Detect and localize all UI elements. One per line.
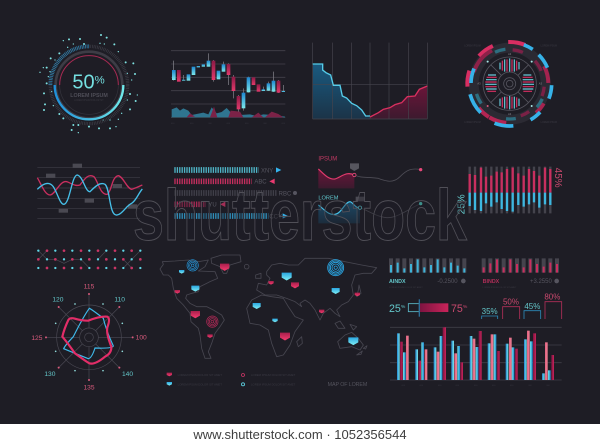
75% label: 75 xyxy=(451,303,463,315)
gauge sublabel: LOREM IPSUM DOLOR SIT xyxy=(74,100,104,102)
25% label: 25 xyxy=(389,303,401,315)
bar chart axis labels: 000 xyxy=(510,385,514,387)
LOREM line xyxy=(318,202,360,214)
IPSUM line xyxy=(318,169,354,179)
AINDX icon xyxy=(461,279,466,283)
bar chart grid xyxy=(390,327,562,380)
index sublabels xyxy=(389,286,517,289)
HUD corner labels: LOREM IPSUM xyxy=(464,122,481,124)
gauge ticks xyxy=(50,46,128,124)
map legend: LOREM IPSUM DOLOR SIT AMET xyxy=(178,373,222,377)
panel: mini line charts xyxy=(318,157,422,223)
gauge value text: 50 xyxy=(72,71,95,93)
bar chart axis labels: 000 xyxy=(420,385,424,387)
HUD right bars xyxy=(523,75,534,91)
bar chart axis labels: 000 xyxy=(456,385,460,387)
blue candles xyxy=(172,61,285,108)
step chart grid xyxy=(313,43,427,119)
gauge base ring xyxy=(56,52,122,118)
gauge pink arc xyxy=(60,56,118,85)
map legend: LOREM IPSUM DOLOR SIT AMET xyxy=(178,382,222,386)
radar labels: 130 xyxy=(44,371,56,378)
map pulse: North America xyxy=(187,260,198,271)
footer strip xyxy=(0,424,600,444)
panel: AINDX and BINDX indices xyxy=(389,258,559,289)
radar labels: 120 xyxy=(52,296,64,303)
LOREM heading: LOREM xyxy=(318,195,339,201)
map legend: LOREM IPSUM DOLOR SIT AMET xyxy=(251,373,296,377)
cyan-blue bars xyxy=(397,333,545,380)
45% bracket: 45% xyxy=(524,302,540,311)
pink fill bar xyxy=(419,303,448,312)
teal outline box xyxy=(408,304,419,312)
gauge value arc xyxy=(55,85,123,119)
map outlines xyxy=(160,255,377,358)
gauge scattered dots xyxy=(39,34,138,133)
25% label: % xyxy=(401,304,406,310)
HUD corner labels: LOREM IPSUM xyxy=(541,46,557,48)
HUD inner rings xyxy=(483,57,536,110)
watermark: shutterstock xyxy=(133,176,468,256)
radar spoke end dots xyxy=(45,293,134,381)
BINDX label: BINDX xyxy=(483,279,500,285)
blue-cyan bars xyxy=(403,334,551,380)
panel: step area chart xyxy=(313,43,427,119)
radar pink polygon xyxy=(62,317,111,364)
radar labels: 140 xyxy=(122,371,133,378)
panel: candlestick chart xyxy=(171,51,286,125)
radar labels: 110 xyxy=(114,297,125,304)
light pink bars xyxy=(406,331,548,380)
HUD corner labels: LOREM IPSUM xyxy=(464,46,481,48)
gauge label: LOREM IPSUM xyxy=(70,93,108,99)
BINDX tracks xyxy=(484,258,557,273)
50% bracket: 50% xyxy=(503,298,519,307)
AINDX tracks xyxy=(391,258,464,273)
IPSUM area xyxy=(318,169,354,188)
blue map pins xyxy=(179,270,358,345)
gauge lower inner arc xyxy=(60,85,118,114)
map title: MAP OF LOREM xyxy=(328,382,367,388)
50% bracket xyxy=(503,298,520,319)
LOREM markers xyxy=(356,197,422,209)
map legend xyxy=(167,373,296,386)
dot matrix pink dots xyxy=(37,249,142,269)
BINDX icon xyxy=(554,279,559,283)
step chart blue line xyxy=(313,64,370,116)
panel: radial HUD xyxy=(451,25,569,143)
HUD axis labels: A3 xyxy=(477,82,481,86)
candlestick axis labels xyxy=(171,123,286,125)
bar chart axis labels: 000 xyxy=(492,385,496,387)
candlestick axis labels: 000 xyxy=(227,123,231,125)
candlestick axis labels: 000 xyxy=(245,123,249,125)
red candles xyxy=(177,61,280,109)
step chart pink line xyxy=(370,86,427,117)
bar chart axis labels: 000 xyxy=(528,385,533,387)
45% bracket xyxy=(524,302,541,319)
step chart pink area xyxy=(370,86,427,119)
HUD top bars xyxy=(500,58,519,72)
index sublabels: LOREM IPSUM DOLOR SIT AMET xyxy=(483,286,517,289)
HUD axis labels: A3 xyxy=(508,52,512,56)
dark red bars xyxy=(400,327,554,380)
label 45%: 45% xyxy=(552,168,563,188)
diverging bar tracks xyxy=(470,167,550,213)
HUD axis labels: A3 xyxy=(508,112,512,116)
panel: smooth line chart xyxy=(37,164,142,219)
map pulse: Asia xyxy=(328,260,344,276)
candlestick axis labels: 000 xyxy=(171,123,175,125)
HUD corner labels: LOREM IPSUM xyxy=(541,122,557,124)
dot matrix cyan dots xyxy=(37,249,141,269)
IPSUM continuation line xyxy=(354,169,421,181)
candlestick grid lines xyxy=(171,51,285,117)
radar labels: 115 xyxy=(84,283,95,290)
radar labels: 125 xyxy=(31,335,43,342)
blue curve xyxy=(37,175,142,215)
candlestick axis labels: 000 xyxy=(208,123,213,125)
candlestick axis labels: 000 xyxy=(263,123,268,125)
panel: radar chart xyxy=(31,283,147,391)
radar labels xyxy=(31,283,147,391)
bar chart axis labels: 000 xyxy=(402,385,406,387)
volume area pink xyxy=(187,107,283,117)
index sublabels: LOREM IPSUM DOLOR SIT AMET xyxy=(389,286,423,289)
HUD faint ring xyxy=(474,48,546,120)
HUD corner dots xyxy=(487,61,533,107)
HUD left bars xyxy=(485,75,497,91)
candle wicks xyxy=(174,53,283,112)
dot matrix connecting lines xyxy=(38,251,140,268)
footer text: www.shutterstock.com · 1052356544 xyxy=(192,427,407,442)
LOREM area xyxy=(318,202,360,223)
BINDX fill xyxy=(484,259,557,273)
HUD bottom bars xyxy=(500,96,519,109)
radar spokes xyxy=(46,294,133,380)
gauge blue ticks xyxy=(50,46,89,85)
bar CCY: CCY xyxy=(269,214,282,220)
HUD teal segments xyxy=(461,35,558,132)
radar rings xyxy=(57,305,121,370)
HUD corner labels xyxy=(464,46,557,124)
diverging pink bars xyxy=(470,168,550,193)
80% bracket xyxy=(544,293,562,319)
AINDX fill xyxy=(391,259,464,273)
LOREM continuation line xyxy=(360,204,421,218)
panel: dot matrix xyxy=(37,249,142,269)
gauge value text: % xyxy=(95,74,105,86)
bar chart axis labels xyxy=(402,385,551,387)
75% label: % xyxy=(463,304,468,310)
panel: grouped bar chart xyxy=(390,327,562,387)
35% bracket: 35% xyxy=(482,307,498,316)
map pulse: South America xyxy=(207,316,218,327)
panel: vertical diverging bars xyxy=(456,167,563,214)
HUD blue segments xyxy=(451,25,569,143)
BINDX value: +3.2550 xyxy=(530,279,552,285)
divider xyxy=(419,299,420,317)
80% bracket: 80% xyxy=(544,293,560,302)
map legend: LOREM IPSUM DOLOR SIT AMET xyxy=(251,382,296,386)
line chart grid xyxy=(37,168,140,219)
HUD pink segments xyxy=(451,25,568,142)
AINDX value: -0.2500 xyxy=(437,279,458,285)
radar blue polygon xyxy=(64,308,113,359)
HUD axis labels xyxy=(477,52,542,116)
radar labels: 100 xyxy=(136,334,147,341)
HUD axis labels: A3 xyxy=(539,82,542,86)
radar labels: 135 xyxy=(83,384,95,391)
candlestick axis labels: 000 xyxy=(282,123,286,125)
panel: horizontal tick bars xyxy=(174,167,297,220)
volume area blue xyxy=(172,107,285,117)
panel: percent comparison xyxy=(389,293,562,319)
AINDX label: AINDX xyxy=(389,279,406,285)
line chart tags xyxy=(46,164,137,213)
diverging blue bars xyxy=(470,193,550,212)
IPSUM heading: IPSUM xyxy=(318,157,337,163)
bar RBC: RBC xyxy=(279,191,292,197)
bar chart axis labels: 000 xyxy=(546,385,551,387)
bar ABC: ABC xyxy=(254,180,267,186)
IPSUM markers xyxy=(350,163,422,177)
panel: gauge 50% xyxy=(39,34,138,133)
bar XNY: XNY xyxy=(261,168,273,174)
pink curve xyxy=(37,176,142,195)
step chart blue area xyxy=(313,64,370,119)
bar YU: YU xyxy=(208,203,217,209)
pink map pins xyxy=(175,264,360,340)
bar chart axis labels: 000 xyxy=(438,385,442,387)
bar chart axis labels: 000 xyxy=(474,385,478,387)
HUD dark pink inner segments xyxy=(462,36,558,132)
radar ring dots xyxy=(55,303,123,371)
candlestick axis labels: 000 xyxy=(190,123,194,125)
panel: world map xyxy=(160,255,377,388)
label 25%: 25% xyxy=(456,194,467,214)
